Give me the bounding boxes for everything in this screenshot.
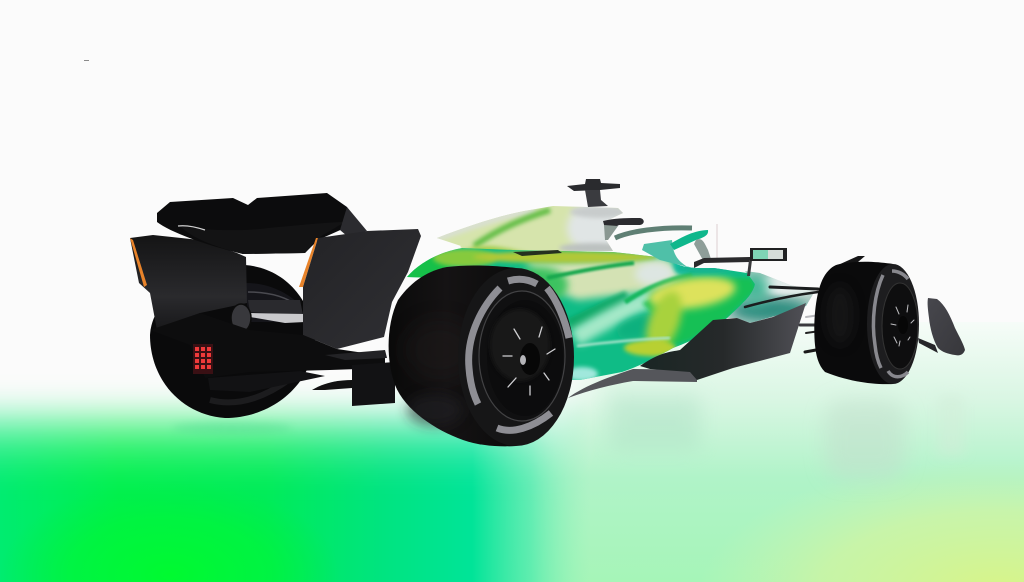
front wheel rim	[882, 283, 918, 369]
rear rain light	[193, 344, 213, 374]
rear right tyre body	[389, 265, 574, 446]
wheel spokes	[503, 327, 555, 395]
top camera pylon	[567, 179, 620, 207]
rear left tyre	[150, 265, 315, 418]
front right tyre	[814, 256, 919, 384]
roll hoop scoop	[603, 218, 644, 232]
right endplate	[303, 229, 421, 349]
background: green reflective floor	[0, 290, 1024, 582]
faint vertical antenna line	[716, 224, 718, 260]
halo base	[642, 240, 700, 270]
front wing endplate	[918, 298, 965, 355]
front tyre sidewall	[867, 264, 919, 384]
engine cover slot	[513, 250, 562, 256]
front floor wedge	[640, 303, 806, 380]
small mark top left	[84, 60, 89, 61]
nose section	[727, 271, 815, 323]
engine cover upper	[437, 206, 623, 251]
left endplate	[130, 235, 247, 330]
halo hoop	[615, 228, 692, 238]
front suspension arms	[745, 287, 820, 352]
right orange light	[299, 238, 318, 287]
left orange light	[130, 238, 147, 287]
mirror and stalk	[694, 248, 787, 276]
exhaust pod	[231, 304, 251, 332]
diffuser and rear crash structure	[150, 313, 395, 406]
rear wing	[130, 193, 421, 349]
floor reflections and shadows	[172, 395, 964, 480]
tyre sidewall	[458, 268, 574, 446]
rear wing upper flap	[157, 193, 347, 254]
main green bodywork	[407, 248, 755, 380]
wheel hub	[520, 343, 540, 375]
floor strip under sidepod	[568, 369, 697, 398]
wheel rim	[479, 291, 565, 421]
cockpit and halo	[567, 179, 712, 270]
white tyre sidewall arcs	[469, 279, 569, 430]
